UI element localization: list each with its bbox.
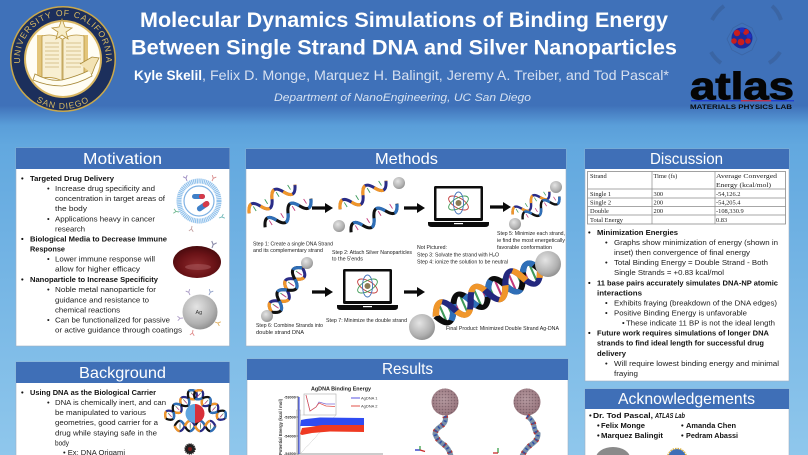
line chart: AgDNA binding energy: Potential Energy (kcal / mol)	[278, 398, 283, 455]
text block: background bullets: body	[55, 438, 69, 448]
text block: discussion bullets: •	[605, 258, 608, 267]
heading: acknowledgements: Acknowledgements	[618, 391, 755, 408]
text block: motivation bullets: Nanoparticle to Increase Specificity	[30, 275, 159, 284]
text block: discussion bullets: These indicate 11 BP is not the ideal length	[626, 318, 775, 328]
icon: axis triad	[493, 448, 498, 453]
text block: acknowledged people: Felix Monge	[601, 421, 645, 430]
illustration: final double strand Ag-DNA	[409, 251, 561, 340]
text block: motivation bullets: guidance and resistance to	[55, 296, 149, 304]
text block: discussion bullets: •	[605, 238, 608, 247]
text block: background bullets: DNA is chemically inert, and can	[55, 398, 166, 407]
text block: discussion bullets: 11 base pairs accurately simulates DNA-NP atomic	[597, 278, 778, 288]
text block: discussion bullets: •	[588, 328, 591, 338]
logo: atlas materials physics lab	[690, 6, 794, 111]
table: converged energies: 0.83	[716, 217, 727, 224]
text block: motivation bullets: •	[21, 234, 24, 244]
text block: discussion bullets: •	[588, 278, 591, 288]
text block: motivation bullets: research	[55, 224, 85, 234]
text block: motivation bullets: Targeted Drug Delivery	[30, 174, 115, 183]
logo: atlas materials physics lab: atlas	[690, 66, 794, 108]
panel: acknowledgements	[585, 389, 789, 455]
icon: silver nanoparticle: Ag	[196, 310, 202, 316]
logo: UC San Diego seal	[10, 6, 116, 112]
molecular render: Ag-DNA structure 1	[432, 388, 458, 455]
text block: acknowledged people: •	[597, 421, 600, 430]
text block: acknowledged people: Dr. Tod Pascal,	[593, 411, 653, 420]
text block: acknowledged people: •	[589, 411, 592, 420]
arrow	[404, 203, 425, 213]
text block: acknowledged people: ATLAS Lab	[654, 411, 685, 420]
text block: motivation bullets: •	[47, 214, 50, 224]
text block: motivation bullets: Applications heavy in cancer	[55, 214, 155, 224]
text block: discussion bullets: Future work requires simulations of longer DNA	[597, 328, 770, 338]
heading: discussion: Discussion	[650, 151, 723, 168]
text block: acknowledged people: •	[681, 431, 684, 440]
text block: motivation bullets: Lower immune response will	[55, 254, 155, 264]
text block: motivation bullets: •	[47, 316, 50, 324]
panel: motivation	[16, 148, 230, 346]
icon: laptop simulation	[428, 186, 489, 227]
department: Department of NanoEngineering, UC San Diego	[274, 92, 531, 104]
text block: step 5: ie find the most energetically	[497, 238, 565, 244]
table: converged energies: Average Converged	[716, 173, 778, 180]
text block: background bullets: •	[47, 398, 50, 407]
heading: methods: Methods	[375, 151, 438, 168]
text block: step 2: to the 5'ends	[332, 256, 363, 262]
table: converged energies: -54,126.2	[716, 191, 740, 198]
panel: discussion	[585, 149, 789, 381]
logo: gold and blue seal	[668, 448, 686, 455]
title	[131, 8, 677, 60]
text block: discussion bullets: inset) then convergence of final energy	[614, 248, 750, 257]
text block: steps 3 and 4 not pictured: Not Pictured:	[417, 245, 447, 251]
text block: motivation bullets: •	[47, 285, 50, 294]
text block: motivation bullets: or active guidance through coatings	[55, 326, 182, 334]
text block: step 6: Step 6: Combine Strands into	[256, 323, 323, 329]
text block: discussion bullets: Minimization Energies	[597, 228, 678, 237]
table: converged energies: Single 1	[590, 191, 611, 198]
text block: discussion bullets: •	[605, 298, 608, 308]
logo: gray sponsor mark	[596, 447, 630, 455]
text block: background bullets	[21, 388, 166, 455]
table: converged energies: -108,330.9	[716, 208, 744, 215]
text block: discussion bullets: fraying	[614, 369, 638, 378]
text block: motivation bullets	[21, 174, 182, 334]
icon: DNA origami triangle with drug	[162, 388, 229, 431]
text block: motivation bullets: •	[47, 184, 50, 193]
table: converged energies: Total Energy	[590, 217, 624, 224]
panel: methods	[246, 149, 566, 346]
text block: step 6: double strand DNA	[256, 330, 305, 336]
icon: dark virus-like nanoparticle	[185, 444, 195, 454]
text block: step 6	[256, 323, 323, 336]
text block: discussion bullets: •	[605, 359, 608, 368]
arrow	[404, 287, 425, 297]
title: Molecular Dynamics Simulations of Binding Energy	[140, 8, 668, 32]
heading: background: Background	[79, 365, 166, 382]
text block: discussion bullets: •	[605, 308, 608, 318]
text block: steps 3 and 4 not pictured	[417, 245, 508, 266]
text block: background bullets: Using DNA as the Biological Carrier	[30, 388, 156, 397]
text block: step 2: Step 2: Attach Silver Nanoparticles	[332, 250, 412, 256]
text block: acknowledged people: Pedram Abassi	[686, 431, 738, 440]
illustration: step 2 strands with silver nanoparticles	[333, 175, 405, 238]
text block: discussion bullets: Will require lowest binding energy and minimal	[614, 359, 779, 368]
text block: discussion bullets: strands to find ideal length for successful drug	[597, 338, 764, 348]
illustration: step 5 minimized strands	[509, 181, 562, 230]
table: converged energies: 300	[654, 191, 663, 198]
title: Between Single Strand DNA and Silver Nanoparticles	[131, 36, 677, 60]
line chart: AgDNA binding energy: -53500	[284, 416, 296, 420]
line chart: AgDNA binding energy	[278, 386, 383, 455]
table: converged energies: Energy (kcal/mol)	[716, 182, 771, 189]
text block: step 2	[332, 250, 412, 262]
panel: background	[16, 362, 230, 455]
table: converged energies: Double	[590, 208, 609, 215]
text block: step 1: and its complementary strand	[253, 248, 323, 254]
heading: results: Results	[382, 361, 433, 378]
logo: UC San Diego seal: UNIVERSITY OF CALIFORNIA	[14, 10, 112, 63]
text block: motivation bullets: chemical reactions	[55, 306, 120, 314]
text block: motivation bullets: •	[47, 254, 50, 264]
text block: motivation bullets: •	[21, 174, 24, 183]
line chart: AgDNA binding energy: AgDNA 1	[361, 396, 378, 400]
line chart: AgDNA binding energy: AgDNA Binding Energy	[311, 386, 371, 392]
text block: final product: Final Product: Minimized Double Strand Ag-DNA	[446, 326, 560, 332]
text block: step 5: Step 5: Minimize each strand,	[497, 231, 565, 237]
text block: step 1: Step 1: Create a single DNA Strand	[253, 242, 333, 248]
icon: silver nanoparticle	[177, 289, 221, 336]
authors: , Felix D. Monge, Marquez H. Balingit, Jeremy A. Treiber, and Tod Pascal*	[202, 67, 670, 83]
text block: motivation bullets: the body	[55, 204, 87, 213]
table: converged energies: -54,205.4	[716, 200, 741, 206]
text block: steps 3 and 4 not pictured: Step 4: ionize the solution to be neutral	[417, 260, 508, 266]
text block: background bullets: geometries, good carrier for a	[55, 418, 159, 427]
text block: background bullets: be manipulated to various	[55, 408, 146, 417]
text block: acknowledged people	[589, 411, 738, 440]
text block: acknowledged people: •	[597, 431, 600, 440]
text block: motivation bullets: Biological Media to Decrease Immune	[30, 234, 167, 244]
table: converged energies: Time (fs)	[654, 173, 677, 180]
text block: background bullets: •	[21, 388, 24, 397]
text block: motivation bullets: concentration in target areas of	[55, 194, 166, 203]
text block: discussion bullets: Graphs show minimization of energy (shown in	[614, 238, 778, 247]
panel: results	[247, 359, 568, 455]
arrow	[312, 287, 333, 297]
table: converged energies: 200	[654, 208, 663, 215]
arrow	[490, 202, 511, 212]
text block: discussion bullets	[588, 228, 779, 378]
illustration: step 6 combined double strand	[261, 257, 313, 322]
text block: steps 3 and 4 not pictured: Step 3: Solvate the strand with H₂O	[417, 252, 499, 258]
text block: motivation bullets: Can be functionalized for passive	[55, 316, 170, 324]
text block: acknowledged people: Amanda Chen	[686, 421, 736, 430]
text block: discussion bullets: Total Binding Energy = Double Strand - Both	[614, 258, 768, 267]
arrow	[312, 203, 333, 213]
logo: UC San Diego seal: SAN DIEGO	[37, 96, 88, 109]
icon: red blood cell	[173, 241, 221, 278]
table: converged energies: Strand	[590, 173, 607, 180]
icon: laptop simulation	[337, 269, 398, 310]
text block: motivation bullets: Increase drug specificity and	[55, 184, 155, 193]
text block: step 1	[253, 242, 333, 254]
text block: motivation bullets: •	[21, 275, 24, 284]
text block: step 5: favorable conformation	[497, 245, 552, 251]
text block: discussion bullets: Positive Binding Energy is unfavorable	[614, 308, 747, 318]
text block: step 7: Step 7: Minimize the double strand	[326, 318, 407, 324]
text block: motivation bullets: Noble metal nanoparticle for	[55, 285, 156, 294]
text block: discussion bullets: •	[588, 228, 591, 237]
icon: liposome with pills	[173, 175, 225, 232]
text block: discussion bullets: Single Strands = +0.83 kcal/mol	[614, 268, 724, 277]
icon: axis triad	[415, 446, 425, 452]
illustration: step 1 strands	[246, 179, 314, 233]
text block: discussion bullets: interactions	[597, 288, 642, 298]
heading: motivation: Motivation	[83, 151, 162, 168]
line chart: AgDNA binding energy: -54000	[284, 434, 296, 438]
text block: discussion bullets: •	[622, 318, 625, 328]
text block: step 5	[497, 231, 565, 251]
text block: acknowledged people: •	[681, 421, 684, 430]
table: converged energies	[588, 172, 786, 224]
table: converged energies: Single 2	[590, 200, 611, 206]
table: converged energies: 200	[654, 200, 663, 206]
authors: Kyle Skelil	[134, 67, 202, 83]
logo: atlas materials physics lab: MATERIALS PHYSICS LAB	[690, 105, 793, 111]
molecular render: Ag-DNA structure 2	[514, 388, 540, 455]
line chart: AgDNA binding energy: -53000	[284, 396, 296, 400]
text block: discussion bullets: Exhibits fraying (breakdown of the DNA edges)	[614, 298, 777, 308]
text block: discussion bullets: delivery	[597, 349, 627, 358]
text block: motivation bullets: allow for higher efficacy	[55, 264, 140, 274]
text block: motivation bullets: Response	[30, 244, 65, 254]
text block: background bullets: drug while staying safe in the	[55, 428, 157, 438]
line chart: AgDNA binding energy: AgDNA 2	[361, 404, 378, 408]
text block: acknowledged people: Marquez Balingit	[601, 431, 663, 440]
